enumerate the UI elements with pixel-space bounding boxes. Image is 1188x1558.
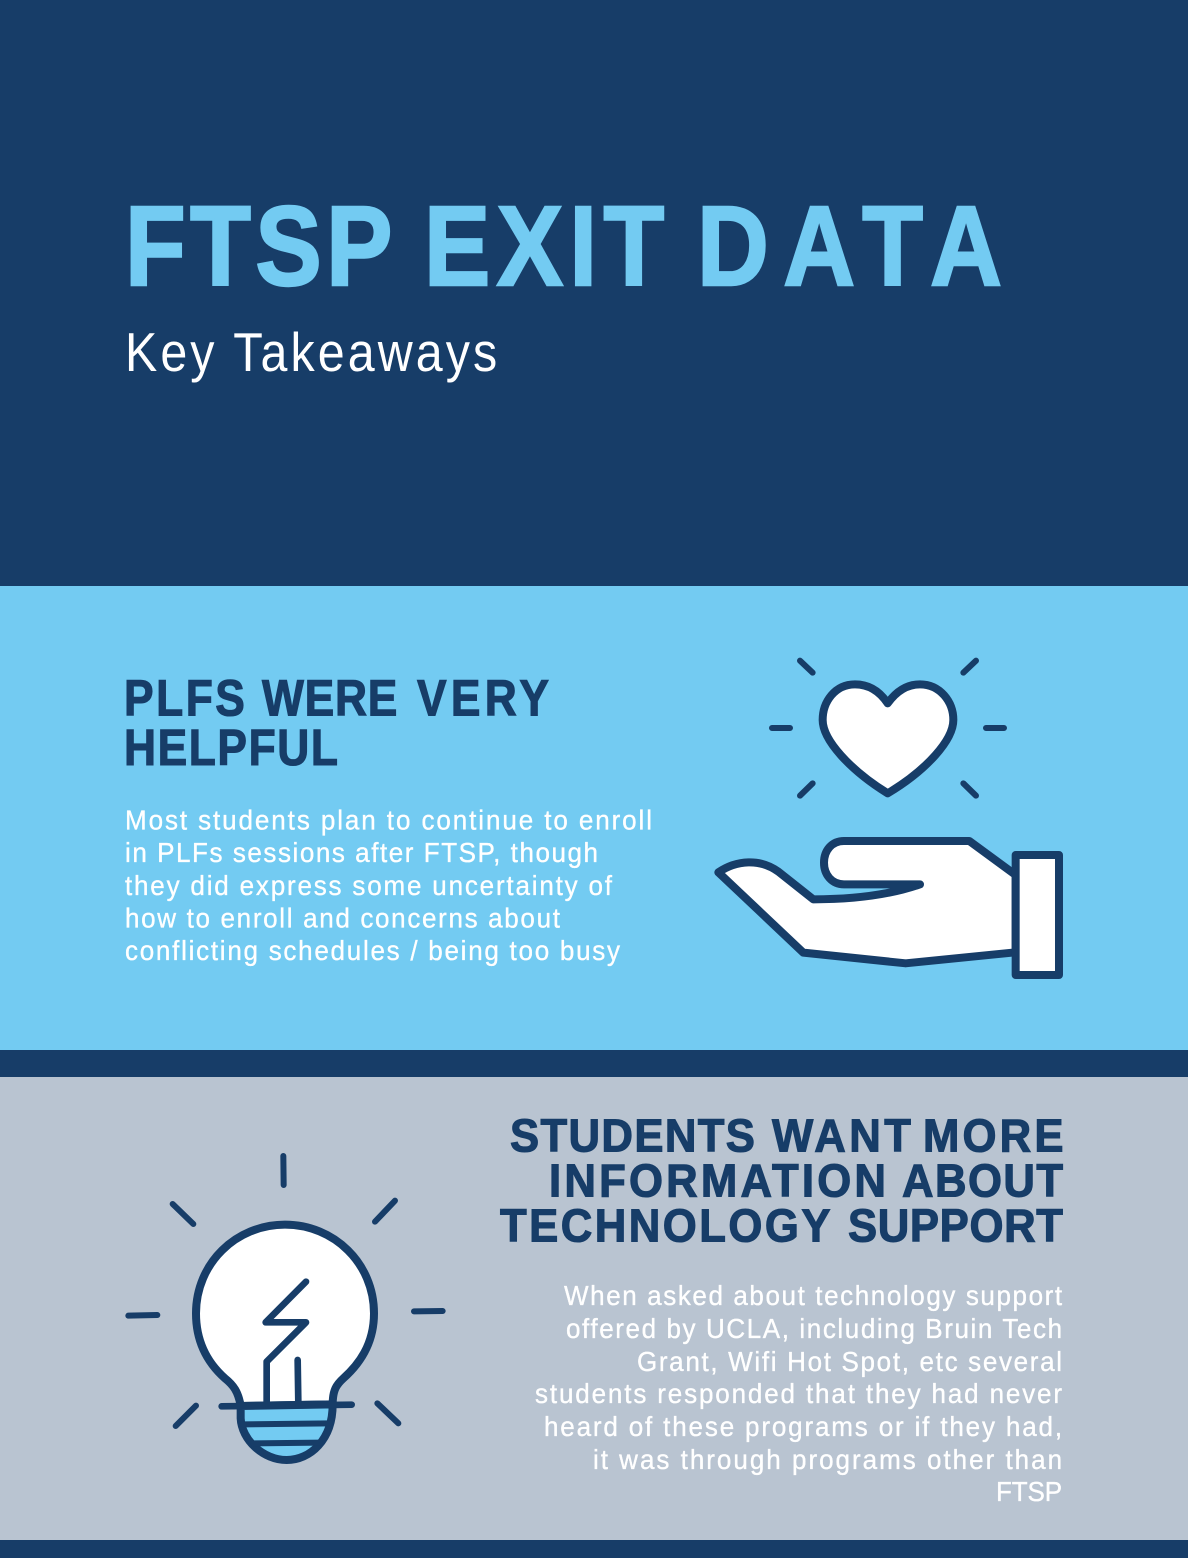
text block: technology description: students responded that they had never	[535, 1378, 1062, 1409]
icon: heart	[823, 684, 953, 793]
subtitle: Key Takeaways	[125, 321, 497, 383]
icon: cuff	[1016, 855, 1059, 975]
panel: dark divider band	[0, 1050, 1188, 1077]
icon: bulb base	[241, 1404, 333, 1460]
heading: PLFs were very helpful	[124, 671, 549, 777]
icon: bulb glass	[196, 1225, 374, 1406]
text block: PLFs description: Most students plan to continue to enroll	[125, 805, 652, 836]
panel: bottom band	[0, 1540, 1188, 1558]
heading: students want more information	[500, 1109, 1064, 1252]
heading: PLFs were very helpful: WERE	[262, 671, 397, 727]
icon: base rim	[222, 1405, 352, 1406]
heading: students want more information: ABOUT	[902, 1154, 1063, 1207]
text block: technology description: FTSP	[996, 1476, 1062, 1507]
heading: students want more information: WANT	[772, 1109, 911, 1162]
text block: technology description: it was through programs other than	[593, 1444, 1062, 1475]
icon: hand	[718, 841, 1016, 963]
panel: technology background	[0, 1077, 1188, 1540]
icon: light bulb	[128, 1156, 443, 1460]
text block: PLFs description: how to enroll and concerns about	[125, 903, 560, 934]
text block: PLFs description	[125, 805, 652, 966]
heading: students want more information: INFORMATION	[549, 1154, 886, 1207]
panel: header background	[0, 0, 1188, 586]
icon: bulb rays	[128, 1156, 443, 1426]
heading: PLFs were very helpful: PLFS	[124, 671, 245, 727]
title	[125, 183, 1002, 309]
text block: technology description: heard of these programs or if they had,	[544, 1411, 1062, 1442]
text block: technology description: Grant, Wifi Hot Spot, etc several	[637, 1346, 1062, 1377]
text block: PLFs description: in PLFs sessions after FTSP, though	[125, 837, 598, 868]
heading: students want more information: SUPPORT	[848, 1199, 1063, 1252]
title: FTSP	[125, 183, 392, 309]
icon: hand holding heart	[718, 661, 1059, 975]
heading: students want more information: TECHNOLOGY	[500, 1199, 831, 1252]
icon: bolt filament	[266, 1282, 306, 1403]
panel: PLFs background	[0, 586, 1188, 1050]
text block: PLFs description: they did express some uncertainty of	[125, 870, 612, 901]
icon: heart rays	[772, 661, 1004, 796]
icon: base stripes	[243, 1423, 330, 1443]
heading: students want more information: MORE	[923, 1109, 1064, 1162]
title: DATA	[697, 183, 1002, 309]
text block: technology description	[535, 1280, 1063, 1507]
text block: technology description: When asked about technology support	[564, 1280, 1063, 1311]
heading: students want more information: STUDENTS	[510, 1109, 755, 1162]
heading: PLFs were very helpful: VERY	[417, 671, 549, 727]
text block: PLFs description: conflicting schedules / being too busy	[125, 935, 620, 966]
heading: PLFs were very helpful: HELPFUL	[124, 720, 338, 777]
title: EXIT	[424, 183, 664, 309]
text block: technology description: offered by UCLA, including Bruin Tech	[566, 1313, 1062, 1344]
